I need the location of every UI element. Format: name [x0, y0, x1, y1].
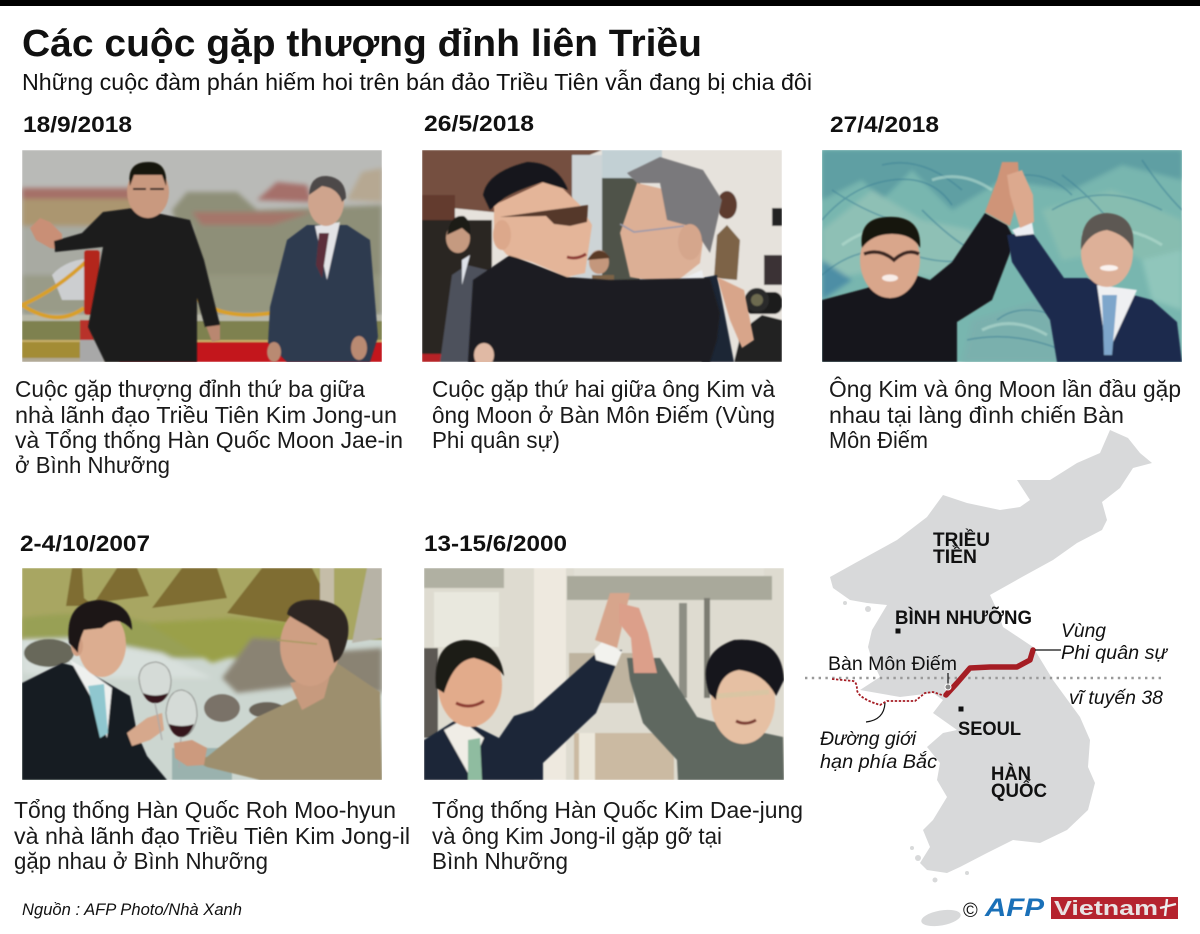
label: northern limit line: hạn phía Bắc [820, 752, 938, 773]
label: 38th parallel: vĩ tuyến 38 [1069, 688, 1163, 709]
caption [15, 376, 403, 478]
panel: summit 18/9/2018 [15, 112, 403, 478]
caption: nhà lãnh đạo Triều Tiên Kim Jong-un [15, 402, 397, 428]
caption: Cuộc gặp thượng đỉnh thứ ba giữa [15, 376, 365, 402]
figure: Moon [267, 176, 378, 362]
date: 13-15/6/2000 [424, 531, 567, 556]
logos: AFP and Vietnam+: © [963, 900, 978, 922]
figure: wine glasses [139, 662, 197, 768]
label: northern limit line: Đường giới [820, 729, 917, 750]
caption: và Tổng thống Hàn Quốc Moon Jae-in [15, 427, 403, 453]
figure: Moon [1007, 170, 1182, 362]
marker: Seoul: SEOUL [958, 719, 1021, 740]
caption: và nhà lãnh đạo Triều Tiên Kim Jong-il [14, 823, 410, 849]
label: North Korea: TRIỀU [933, 529, 990, 551]
date: 26/5/2018 [424, 111, 534, 136]
figure: Kim Jong-il [174, 600, 382, 780]
label: South Korea: HÀN [991, 763, 1031, 785]
photo: Kim Jong-un and Moon Jae-in in Pyongyang [22, 150, 382, 362]
logos: AFP and Vietnam+ [963, 894, 1178, 922]
figure: Kim [468, 162, 754, 367]
caption: Ông Kim và ông Moon lần đầu gặp [829, 375, 1181, 402]
caption: Phi quân sự) [432, 427, 560, 453]
caption: Môn Điếm [829, 427, 928, 453]
38th parallel dotted line [805, 677, 1165, 679]
photo: Roh Moo-hyun and Kim Jong-il toast [22, 568, 382, 780]
caption: gặp nhau ở Bình Nhưỡng [14, 848, 268, 874]
NLL leader line [866, 703, 885, 722]
subtitle: Những cuộc đàm phán hiếm hoi trên bán đảo Triều Tiên vẫn đang bị chia đôi [22, 69, 812, 95]
label: North Korea [933, 529, 990, 568]
photo: Kim and Moon raise joined hands [822, 150, 1182, 362]
figure: Kim Dae-jung [424, 593, 630, 780]
label: DMZ: Vùng [1061, 621, 1106, 642]
caption: Tổng thống Hàn Quốc Roh Moo-hyun [14, 797, 396, 823]
title: Các cuộc gặp thượng đỉnh liên Triều [22, 23, 702, 65]
caption: nhau tại làng đình chiến Bàn [829, 402, 1124, 428]
date: 2-4/10/2007 [20, 531, 150, 556]
figure: Moon [620, 157, 734, 362]
logos: AFP and Vietnam+: AFP [984, 894, 1044, 922]
DMZ leader line [1035, 649, 1061, 651]
figure: Roh [22, 600, 167, 780]
Panmunjom marker [945, 673, 951, 690]
caption [432, 376, 775, 453]
panel: summit 2-4/10/2007 [14, 531, 410, 874]
demilitarized zone [946, 650, 1033, 695]
date: 18/9/2018 [23, 112, 132, 137]
label: South Korea: QUỐC [991, 780, 1047, 802]
caption [829, 375, 1181, 453]
label: North Korea: TIỀN [933, 546, 977, 568]
caption [432, 797, 803, 874]
caption [14, 797, 410, 874]
caption: và ông Kim Jong-il gặp gỡ tại [432, 823, 722, 849]
label: Panmunjom: Bàn Môn Điếm [828, 654, 957, 675]
caption: ông Moon ở Bàn Môn Điếm (Vùng [432, 402, 775, 428]
northern limit line [832, 679, 945, 705]
label: DMZ: Phi quân sự [1061, 643, 1169, 664]
panel: summit 27/4/2018 [822, 112, 1182, 453]
photo: Kim Dae-jung and Kim Jong-il raise joined hands [424, 568, 784, 780]
logos: AFP and Vietnam+: Vietnam [1054, 898, 1158, 920]
label: South Korea [991, 763, 1047, 802]
caption: ở Bình Nhưỡng [15, 452, 170, 478]
marker: Pyongyang: BÌNH NHƯỠNG [895, 607, 1032, 629]
panel: summit 13-15/6/2000 [424, 531, 803, 874]
date: 27/4/2018 [830, 112, 939, 137]
caption: Tổng thống Hàn Quốc Kim Dae-jung [432, 797, 803, 823]
figure: Kim [30, 162, 220, 362]
caption: Bình Nhưỡng [432, 848, 568, 874]
label: northern limit line [820, 729, 938, 773]
source note: Nguồn : AFP Photo/Nhà Xanh [22, 900, 242, 919]
marker: Seoul [958, 706, 1021, 740]
figure: Kim Jong-il [619, 603, 784, 780]
label: DMZ [1061, 621, 1169, 664]
land mass [830, 430, 1152, 929]
caption: Cuộc gặp thứ hai giữa ông Kim và [432, 376, 775, 402]
panel: summit 26/5/2018 [422, 111, 782, 453]
figure: Kim [822, 162, 1020, 362]
map: Korean peninsula [805, 430, 1169, 929]
photo: Kim and Moon embrace at Panmunjom [422, 150, 782, 362]
